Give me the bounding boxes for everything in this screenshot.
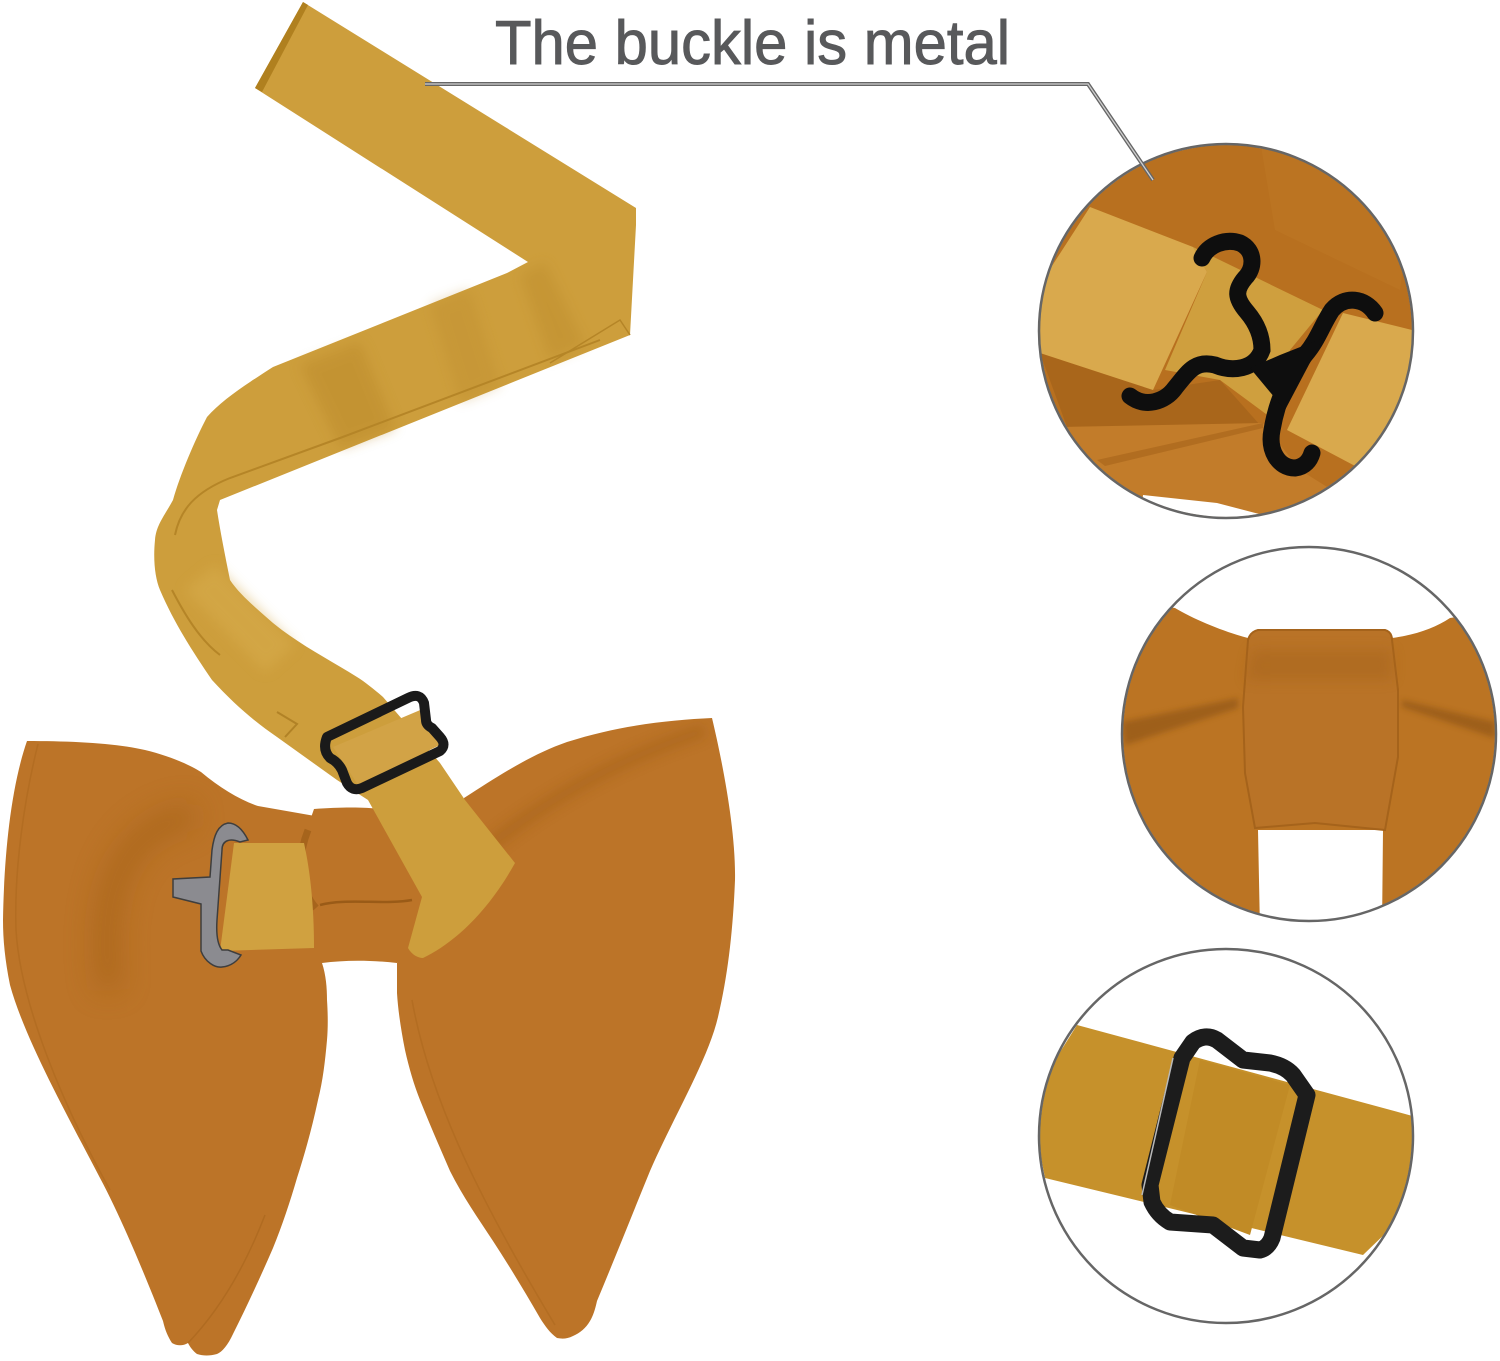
bow tie: wings and knot — [3, 718, 735, 1356]
black slider on strap — [325, 696, 444, 789]
gold strap back — [1165, 247, 1323, 417]
left wing — [3, 741, 328, 1356]
gold strap right — [1287, 313, 1420, 467]
metal hook buckle with strap — [173, 823, 314, 967]
heading: The buckle is metal — [495, 9, 1010, 78]
strap folds and highlights — [172, 2, 630, 737]
strap — [154, 2, 636, 958]
black metal clasp — [1130, 241, 1262, 402]
leader line — [425, 84, 1153, 180]
strap segment through slider — [333, 708, 440, 785]
gold strap main — [1030, 207, 1207, 390]
right wing — [397, 718, 735, 1339]
detail circle: slider — [1030, 945, 1422, 1327]
detail circle: metal buckle — [1030, 140, 1422, 530]
knot — [301, 808, 440, 963]
detail circle: fabric knot — [1120, 545, 1500, 930]
black slider — [1150, 1037, 1307, 1250]
